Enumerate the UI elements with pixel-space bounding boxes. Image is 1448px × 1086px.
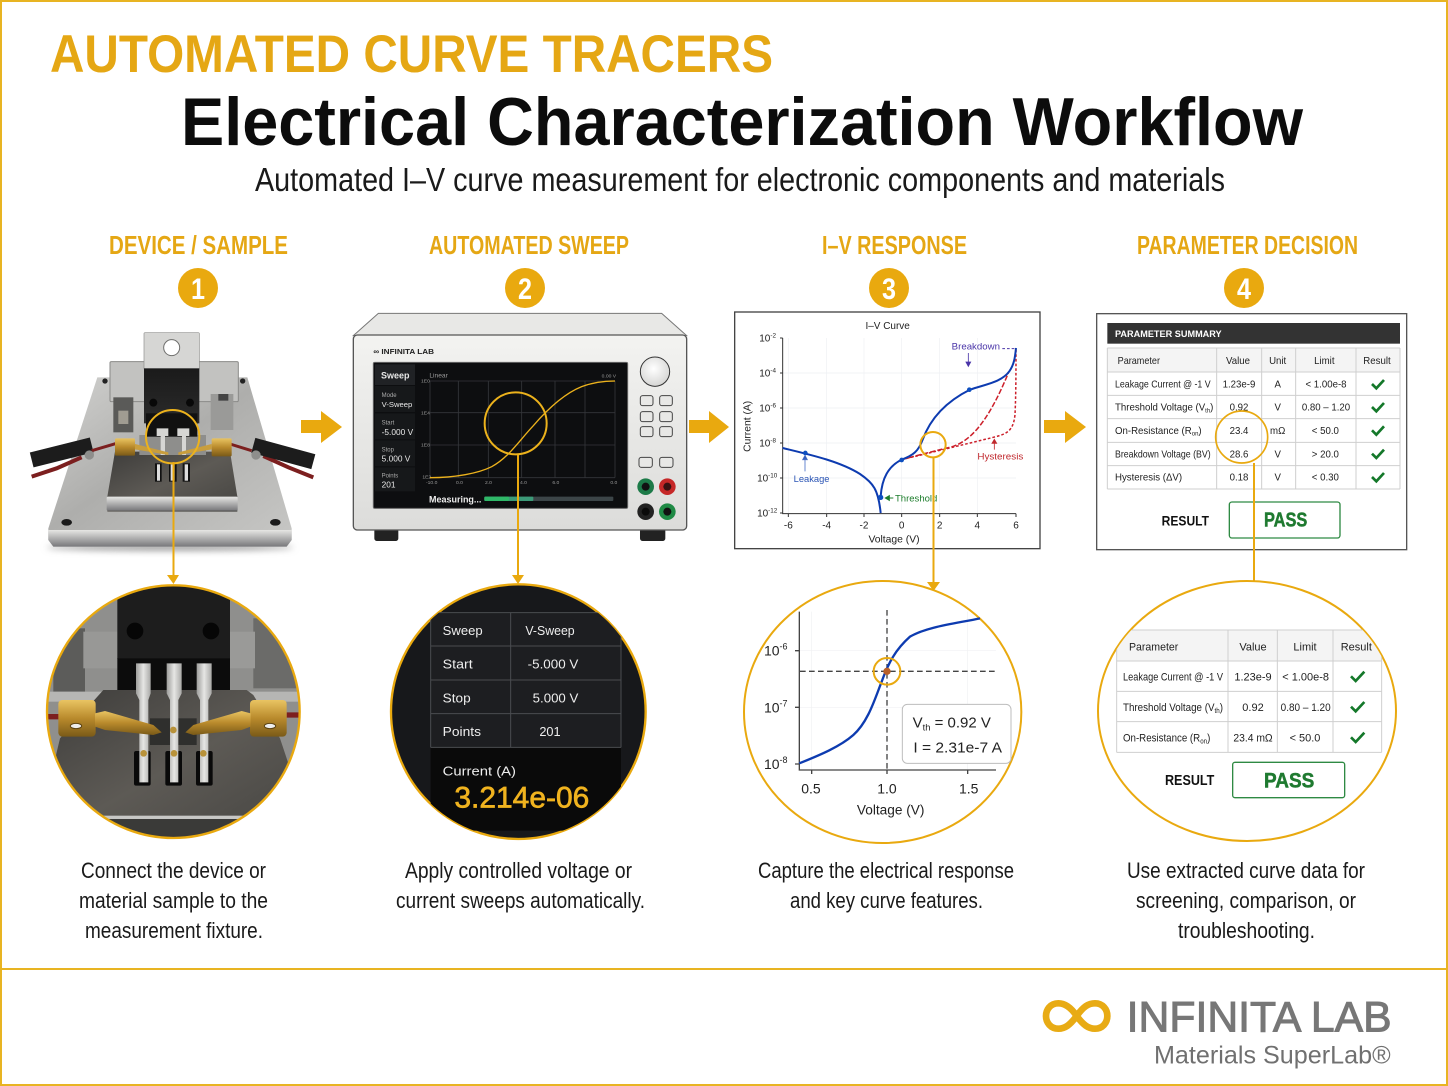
current reading: 3.214e-06 <box>454 782 589 815</box>
y axis tick labels: -8 <box>770 438 776 445</box>
knob <box>640 357 670 386</box>
summary table text: 0.18 <box>1230 473 1248 484</box>
dark fixture plate <box>107 435 238 512</box>
screen side menu: Start <box>382 420 395 426</box>
panel: I-V curve plot <box>735 312 1040 549</box>
caption: step 2: current sweeps automatically. <box>396 888 645 913</box>
label: breakdown <box>952 342 1015 366</box>
settings disc <box>391 584 646 839</box>
threshold marker <box>874 658 900 685</box>
summary table text: V <box>1274 473 1281 484</box>
settings text <box>443 623 578 739</box>
detail background metal <box>48 600 298 762</box>
summary table text: 1.23e-9 <box>1223 379 1255 390</box>
screen axis labels: 6.0 <box>552 480 559 486</box>
detail circle ring <box>47 585 300 838</box>
zoom tick labels: -6 <box>780 642 788 652</box>
x axis title: Voltage (V) <box>868 535 920 546</box>
instrument screen <box>373 362 628 508</box>
y axis tick labels: -12 <box>768 508 778 515</box>
hysteresis dashed curves <box>902 348 1016 460</box>
zoom tick labels: -7 <box>780 698 788 708</box>
screen axis labels: 2.0 <box>485 480 492 486</box>
label: hysteresis <box>977 439 1024 462</box>
detail left probe <box>58 700 162 737</box>
pass badge <box>1229 502 1340 538</box>
blue response curve <box>783 348 1016 513</box>
zoom tick labels <box>764 642 979 797</box>
arrow: step 2 to step 3 <box>689 411 729 443</box>
detail table text: 0.92 <box>1242 702 1264 714</box>
value highlight circle <box>1216 411 1268 463</box>
zoom tick labels: 10 <box>764 756 780 772</box>
zoom tick labels: 0.5 <box>801 781 821 797</box>
brand mark on instrument: ∞ INFINITA LAB <box>373 347 434 356</box>
detail side brackets <box>47 618 300 702</box>
y axis tick labels: -2 <box>770 333 776 340</box>
detail circle: threshold zoom plot <box>744 581 1021 843</box>
caption: step 1: material sample to the <box>79 888 268 913</box>
screen axis labels <box>421 373 617 486</box>
label: threshold: Threshold <box>895 493 937 503</box>
heading: electrical characterization workflow: Electrical Characterization Workflow <box>181 84 1304 160</box>
connector: step 3 <box>927 458 940 591</box>
detail table text: 1.23e-9 <box>1234 672 1272 684</box>
threshold value callout: I = 2.31e-7 A <box>913 739 1002 756</box>
highlight circle <box>146 410 199 463</box>
plot axes <box>780 338 1016 517</box>
screen side menu: Sweep <box>381 370 410 380</box>
detail pass badge: PASS <box>1264 769 1314 793</box>
instrument front panel <box>353 335 687 530</box>
detail table text: < 50.0 <box>1290 733 1320 745</box>
summary table text: 28.6 <box>1230 449 1248 460</box>
label: leakage: Leakage <box>794 474 829 484</box>
screen axis labels: 0.0 <box>610 480 617 486</box>
summary table text: Result <box>1363 356 1391 367</box>
zoom tick labels: 1.0 <box>877 781 897 797</box>
detail table text: Threshold Voltage (V <box>1123 702 1226 714</box>
detail pass badge <box>1233 762 1345 798</box>
summary table text: 0.80 – 1.20 <box>1302 403 1350 414</box>
summary table text: mΩ <box>1270 426 1285 437</box>
number badge 2 <box>505 268 545 308</box>
device leads <box>157 428 189 455</box>
summary header bar <box>1107 323 1400 344</box>
summary table text: Hysteresis (ΔV) <box>1115 473 1182 484</box>
summary table text: V <box>1274 403 1281 414</box>
check marks <box>1372 380 1384 481</box>
number badge 2: 2 <box>518 273 532 306</box>
settings text: 5.000 V <box>533 690 578 705</box>
detail dark plate <box>56 690 288 837</box>
number badge 3 <box>869 268 909 308</box>
brass probes <box>115 438 232 456</box>
settings text: Stop <box>443 690 471 705</box>
y axis tick labels: -6 <box>770 403 776 410</box>
screen axis labels: 0.0 <box>456 480 463 486</box>
x axis tick labels: 4 <box>975 520 981 531</box>
icon: infinity mark <box>1046 1003 1107 1029</box>
summary table text: Value <box>1226 356 1250 367</box>
summary table grid <box>1107 348 1400 489</box>
settings text: Sweep <box>443 623 483 638</box>
caption: step 1: Connect the device or <box>81 858 266 883</box>
summary table text: V <box>1274 449 1281 460</box>
plot frame <box>735 312 1040 549</box>
zoom tick labels: 1.5 <box>959 781 979 797</box>
x axis tick labels: 2 <box>937 520 943 531</box>
arrow: step 3 to step 4 <box>1044 411 1086 443</box>
panel: parameter summary table <box>1097 314 1407 550</box>
instrument top <box>353 313 687 336</box>
settings text: Points <box>443 724 481 739</box>
caption: step 4: screening, comparison, or <box>1136 888 1356 913</box>
screen axis labels: 1E0 <box>421 379 430 385</box>
summary table text: 0.92 <box>1230 403 1248 414</box>
x axis tick labels: 6 <box>1013 520 1019 531</box>
settings text: V-Sweep <box>525 623 575 638</box>
detail table text: Limit <box>1293 641 1317 653</box>
summary table text: < 0.30 <box>1312 473 1339 484</box>
plot disc <box>744 581 1021 843</box>
caption: step 2: Apply controlled voltage or <box>405 858 632 883</box>
summary table text: Limit <box>1314 356 1335 367</box>
brand tagline: Materials SuperLab® <box>1154 1042 1391 1069</box>
step 2 heading: AUTOMATED SWEEP <box>429 230 629 260</box>
summary table text: Threshold Voltage (V <box>1115 403 1205 414</box>
threshold crosshair <box>800 610 997 770</box>
step 1 heading: DEVICE / SAMPLE <box>109 230 288 260</box>
y axis tick labels: 10 <box>759 334 770 345</box>
summary table text: ) <box>1198 426 1202 437</box>
caption: step 4 <box>1127 858 1365 943</box>
caption: step 3 <box>758 858 1014 913</box>
y axis title: Current (A) <box>742 401 753 452</box>
caption: step 3: Capture the electrical response <box>758 858 1014 883</box>
detail slots <box>134 751 213 786</box>
fixture shadow <box>47 544 293 551</box>
zoom tick labels: 10 <box>764 699 780 715</box>
screen axis labels: 1E4 <box>421 410 430 416</box>
number badge 4: 4 <box>1237 273 1251 306</box>
step 4 heading: PARAMETER DECISION <box>1137 230 1358 260</box>
plot grid <box>783 338 1016 513</box>
detail table text: ) <box>1220 702 1223 714</box>
zoom x axis title: Voltage (V) <box>857 802 924 817</box>
detail table text: < 1.00e-8 <box>1282 672 1329 684</box>
label: hysteresis: Hysteresis <box>977 452 1024 462</box>
y axis tick labels: 10 <box>759 369 770 380</box>
screen side menu: 201 <box>382 480 396 490</box>
summary table text: ) <box>1210 403 1213 414</box>
threshold value callout: V <box>913 714 923 731</box>
screen side menu: V-Sweep <box>382 400 412 409</box>
side blocks <box>113 394 233 432</box>
caption: step 4: troubleshooting. <box>1178 918 1315 943</box>
y axis tick labels: 10 <box>757 474 768 485</box>
settings text: -5.000 V <box>528 657 578 672</box>
connector: step 1 <box>167 462 179 584</box>
detail table text <box>1123 641 1372 746</box>
right cable <box>230 444 313 477</box>
panel: test fixture with device <box>32 333 313 551</box>
caption: step 1: measurement fixture. <box>85 918 263 943</box>
connector: step 2 <box>512 455 524 584</box>
connector: step 4 <box>1253 463 1255 581</box>
screen axis labels: 4.0 <box>520 480 527 486</box>
settings text: Start <box>443 657 473 672</box>
device body <box>144 368 199 437</box>
caption: step 4: Use extracted curve data for <box>1127 858 1365 883</box>
control buttons <box>639 396 673 467</box>
result label: RESULT <box>1162 512 1209 528</box>
caption: step 1 <box>79 858 268 943</box>
zoom tick labels: -8 <box>780 755 788 765</box>
screen curve <box>430 381 615 478</box>
summary table text: th <box>1205 408 1210 414</box>
detail circle: probes on device leads <box>40 575 307 842</box>
x axis tick labels <box>784 520 1019 531</box>
x axis tick labels: 0 <box>899 520 905 531</box>
summary table text: On-Resistance (R <box>1115 426 1192 437</box>
left cable <box>32 443 117 477</box>
footer logo <box>1046 994 1392 1069</box>
caption: step 3: and key curve features. <box>790 888 983 913</box>
detail table text: 0.80 – 1.20 <box>1281 702 1331 714</box>
step 3 heading: I–V RESPONSE <box>822 230 967 260</box>
pass badge: PASS <box>1264 510 1307 532</box>
detail wires <box>47 715 302 717</box>
settings grid <box>431 613 621 747</box>
screen axis labels: Linear <box>429 373 449 380</box>
screen side menu: -5.000 V <box>382 427 414 437</box>
screen side menu: Stop <box>382 448 395 454</box>
footer divider <box>0 968 1448 970</box>
detail right probe <box>185 700 287 737</box>
curve markers <box>803 387 972 500</box>
screen grid <box>430 381 615 478</box>
detail table text: 23.4 mΩ <box>1233 733 1273 745</box>
screen side menu <box>375 364 415 491</box>
detail table text: On-Resistance (R <box>1123 733 1210 745</box>
detail circle: sweep settings <box>391 584 646 839</box>
readout fill <box>431 747 621 831</box>
detail device body <box>117 585 230 690</box>
x axis tick labels: -4 <box>822 520 832 531</box>
summary table text: Leakage Current @ -1 V <box>1115 379 1211 390</box>
summary table text: 23.4 <box>1230 426 1249 437</box>
detail table text: Value <box>1239 641 1267 653</box>
threshold value callout <box>902 704 1011 763</box>
plot highlight circle <box>920 432 946 457</box>
y axis tick labels: 10 <box>759 439 770 450</box>
table frame <box>1097 314 1407 550</box>
zoom axes <box>795 612 996 774</box>
threshold value callout: = 0.92 V <box>930 714 991 731</box>
detail table text: on <box>1200 739 1207 746</box>
detail table text: Result <box>1341 641 1372 653</box>
number badge 3: 3 <box>882 273 896 306</box>
label: leakage <box>794 455 829 484</box>
rear bracket <box>110 362 238 402</box>
screen axis labels: 1E2 <box>422 474 431 480</box>
progress bar <box>484 497 613 501</box>
current label: Current (A) <box>443 764 516 779</box>
number badge 1 <box>178 268 218 308</box>
summary table text: > 20.0 <box>1312 449 1339 460</box>
detail table text: th <box>1215 708 1220 715</box>
detail circle: decision table <box>1098 581 1396 841</box>
screen axis labels: -10.0 <box>426 480 438 486</box>
settings text: 201 <box>539 724 561 739</box>
x axis tick labels: -2 <box>860 520 869 531</box>
arrow: step 1 to step 2 <box>301 411 342 443</box>
summary table text <box>1115 356 1391 484</box>
detail table text: Parameter <box>1129 641 1179 653</box>
y axis tick labels: -4 <box>770 368 776 375</box>
summary table text: < 1.00e-8 <box>1305 379 1347 390</box>
summary table text: < 50.0 <box>1312 426 1339 437</box>
base plate <box>48 377 292 547</box>
detail table text: Leakage Current @ -1 V <box>1123 672 1224 684</box>
screen side menu: 5.000 V <box>382 454 411 464</box>
device tab with hole <box>144 333 199 369</box>
number badge 1: 1 <box>191 273 205 306</box>
summary table text: Parameter <box>1118 356 1161 367</box>
detail leads <box>136 663 212 782</box>
banana jacks <box>637 478 676 520</box>
y axis tick labels: 10 <box>757 509 768 520</box>
detail table text: ) <box>1207 733 1210 745</box>
summary table text: Unit <box>1269 356 1287 367</box>
y axis tick labels: -10 <box>768 473 778 480</box>
y axis tick labels: 10 <box>759 404 770 415</box>
plot title: I–V Curve <box>865 321 910 332</box>
detail result label: RESULT <box>1165 773 1215 789</box>
threshold value callout: th <box>923 723 930 733</box>
zoom grid <box>799 612 996 770</box>
zoom blue curve <box>799 618 980 763</box>
summary table text: on <box>1192 432 1198 438</box>
y axis tick labels <box>757 333 778 520</box>
panel: automated curve tracer instrument <box>353 313 687 541</box>
x axis tick labels: -6 <box>784 520 793 531</box>
brand name: INFINITA LAB <box>1127 994 1392 1042</box>
summary table text: A <box>1274 379 1281 390</box>
screen highlight circle <box>485 392 547 454</box>
summary header bar: PARAMETER SUMMARY <box>1115 329 1222 339</box>
number badge 4 <box>1224 268 1264 308</box>
detail solder points <box>140 727 207 757</box>
label: breakdown: Breakdown <box>952 342 1000 352</box>
detail check marks <box>1351 672 1364 742</box>
screen side menu: Points <box>382 474 398 480</box>
screen axis labels: 0.00 V <box>602 374 617 380</box>
table disc <box>1098 581 1396 841</box>
zoom tick labels: 10 <box>764 643 780 659</box>
caption: step 2 <box>396 858 645 913</box>
detail table grid <box>1117 630 1382 752</box>
subtitle: Automated I–V curve measurement for electronic components and materials <box>255 161 1225 198</box>
screen side menu: Mode <box>382 393 397 399</box>
screen axis labels: 1E8 <box>421 443 430 449</box>
settings panel fill <box>430 612 621 638</box>
measuring status: Measuring... <box>429 494 481 504</box>
summary table text: Breakdown Voltage (BV) <box>1115 449 1211 460</box>
title: automated curve tracers: AUTOMATED CURVE TRACERS <box>50 25 773 84</box>
instrument feet <box>374 528 665 541</box>
